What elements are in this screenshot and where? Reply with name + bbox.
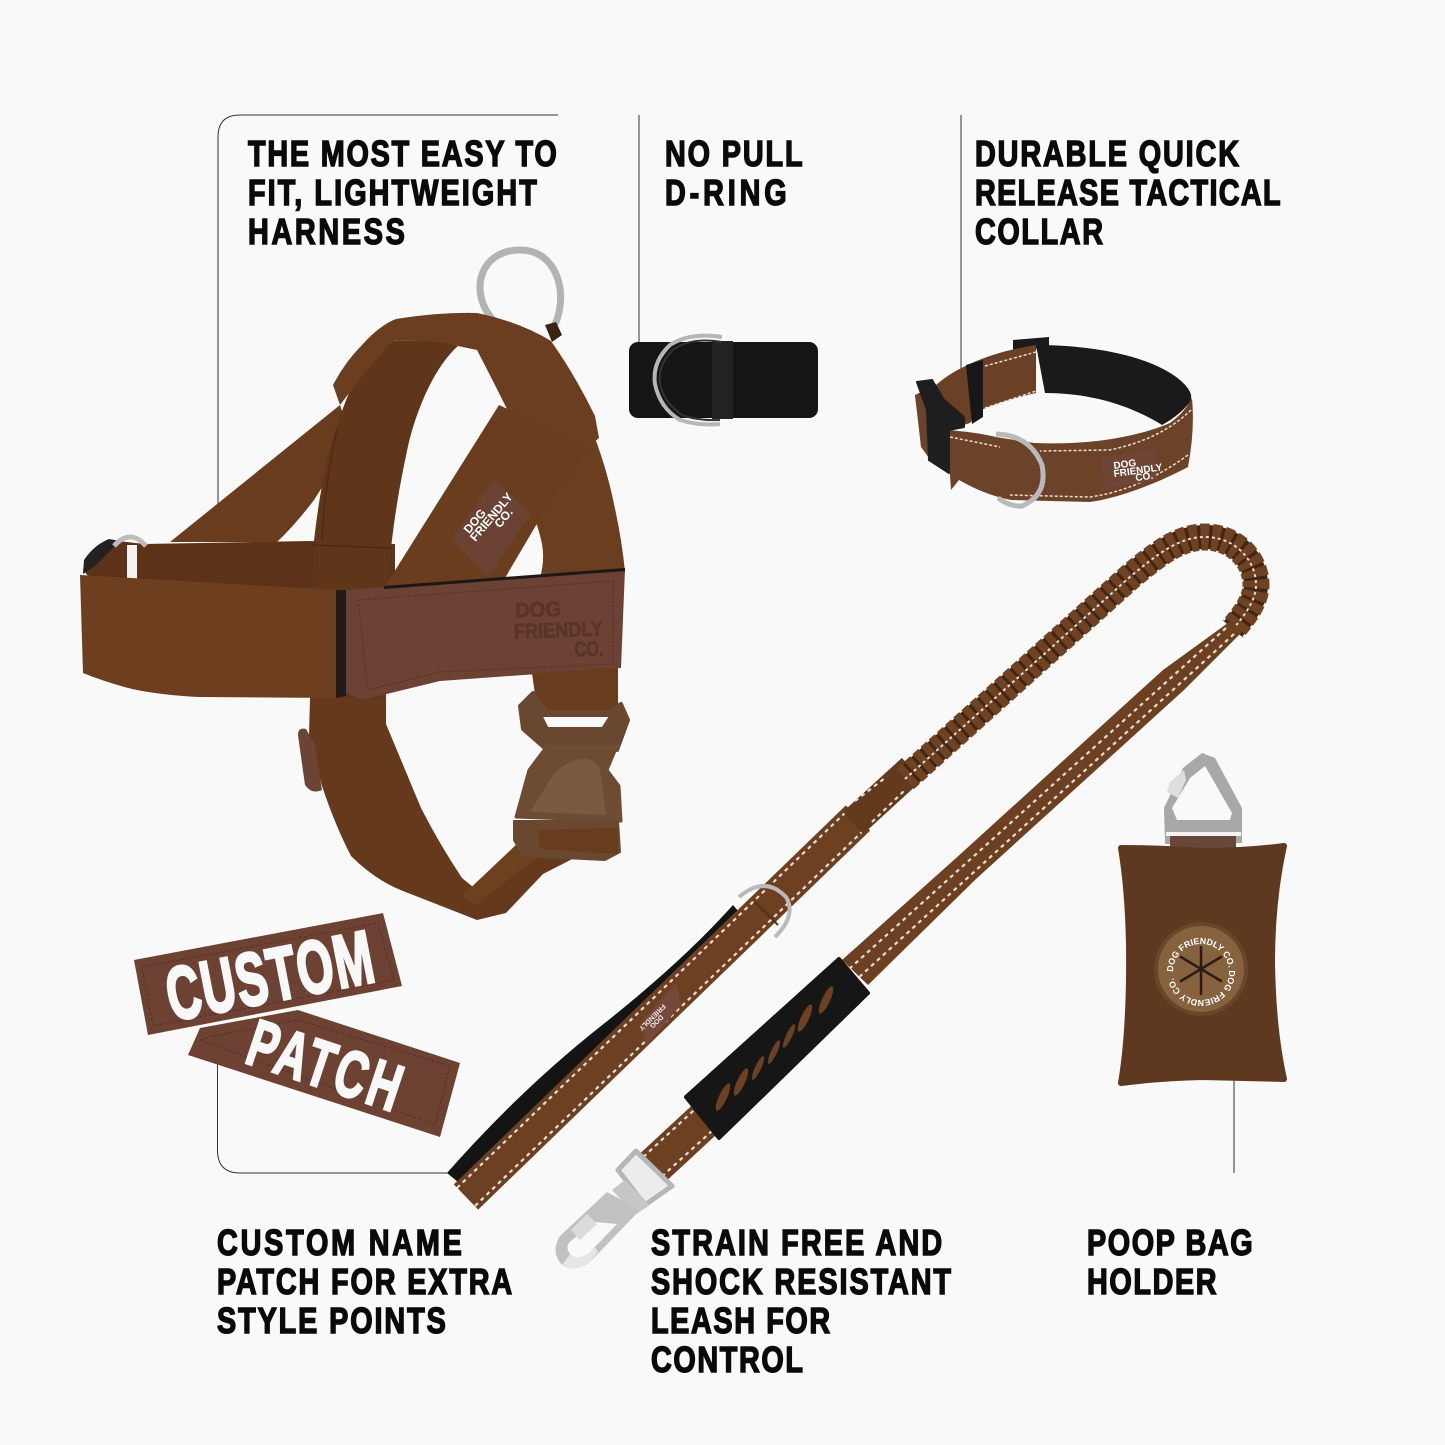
lower strap bbox=[648, 1110, 715, 1172]
diagonal label: FRIENDLY bbox=[467, 490, 516, 544]
caption: leash: LEASH FOR bbox=[651, 1300, 830, 1341]
heading: collar: RELEASE TACTICAL bbox=[975, 172, 1281, 213]
right side strap bbox=[532, 425, 625, 578]
patch: custom: CUSTOM bbox=[159, 916, 380, 1038]
belt bbox=[80, 575, 336, 698]
heading: collar bbox=[975, 133, 1281, 252]
patch: patch bbox=[188, 1010, 460, 1137]
return strap bbox=[842, 620, 1242, 985]
handle and middle strap bbox=[466, 818, 858, 1197]
quick release buckle bbox=[917, 380, 964, 473]
caption: leash: CONTROL bbox=[651, 1339, 803, 1380]
caption: poop bag holder bbox=[1087, 1222, 1253, 1302]
carabiner bbox=[1164, 753, 1242, 844]
caption: custom patch: PATCH FOR EXTRA bbox=[217, 1261, 512, 1302]
handle label bbox=[637, 983, 681, 1046]
poop bag holder bbox=[1118, 753, 1287, 1086]
rubber grip bbox=[686, 959, 868, 1138]
collar label: CO. bbox=[1135, 471, 1154, 484]
bungee section bbox=[905, 537, 1256, 779]
heading: d-ring: NO PULL bbox=[665, 133, 803, 174]
sleeve bbox=[853, 769, 912, 823]
heading: harness bbox=[248, 133, 557, 252]
collar label bbox=[1102, 448, 1164, 490]
diagonal label: DOG bbox=[461, 506, 489, 536]
band stitching bbox=[1040, 410, 1191, 451]
lining bbox=[408, 328, 480, 342]
pouch body bbox=[1121, 846, 1284, 1083]
front diagonal strap bbox=[384, 405, 590, 588]
diagonal label: CO. bbox=[491, 505, 516, 531]
caption: custom patch: STYLE POINTS bbox=[217, 1300, 446, 1341]
collar label: FRIENDLY bbox=[1113, 462, 1163, 480]
tri-glide slider bbox=[298, 729, 322, 792]
caption: custom patch bbox=[217, 1222, 512, 1341]
leather panel bbox=[346, 568, 625, 700]
velcro edge bbox=[336, 590, 346, 698]
heading: d-ring bbox=[665, 133, 803, 213]
caption: leash bbox=[651, 1222, 951, 1380]
upper band bbox=[915, 345, 1036, 440]
leather panel: CO. bbox=[574, 637, 604, 661]
handle label: FRIENDLY bbox=[637, 1002, 666, 1032]
harness bbox=[80, 250, 628, 920]
sliding ring bbox=[739, 886, 790, 937]
caption: leash: SHOCK RESISTANT bbox=[651, 1261, 951, 1302]
collar label: DOG bbox=[1113, 458, 1137, 472]
swivel snap hook bbox=[555, 1151, 672, 1268]
badge bbox=[1154, 922, 1248, 1016]
patch word: PATCH bbox=[239, 1005, 412, 1125]
front band bbox=[947, 398, 1193, 502]
black handle lining bbox=[447, 905, 750, 1200]
heading: harness: THE MOST EASY TO bbox=[248, 133, 557, 174]
caption: poop bag holder: POOP BAG bbox=[1087, 1222, 1253, 1263]
black keeper bbox=[966, 360, 983, 424]
caption: poop bag holder: HOLDER bbox=[1087, 1261, 1217, 1302]
neck loop bbox=[310, 340, 458, 700]
d-ring velcro patch bbox=[629, 336, 818, 424]
heading: harness: HARNESS bbox=[248, 211, 405, 252]
top keeper bbox=[1013, 337, 1049, 352]
leather panel: DOG bbox=[515, 598, 562, 623]
leash bbox=[447, 537, 1256, 1268]
top folded strap bbox=[333, 313, 599, 447]
buckle strap bbox=[532, 668, 618, 716]
collar bbox=[915, 337, 1193, 506]
collar inner lining bbox=[1036, 345, 1191, 425]
d-ring on harness bbox=[480, 250, 561, 330]
heading: d-ring: D-RING bbox=[665, 172, 787, 213]
diagonal back strap bbox=[170, 405, 352, 542]
leather panel: FRIENDLY bbox=[513, 618, 603, 644]
left band behind buckle bbox=[915, 395, 932, 462]
diagonal label bbox=[451, 480, 531, 577]
heading: collar: DURABLE QUICK bbox=[975, 133, 1239, 174]
collar d-ring bbox=[996, 434, 1043, 506]
plastic buckle bbox=[514, 693, 628, 860]
heading: collar: COLLAR bbox=[975, 211, 1103, 252]
custom name patches bbox=[134, 913, 460, 1137]
heading: harness: FIT, LIGHTWEIGHT bbox=[248, 172, 537, 213]
caption: leash: STRAIN FREE AND bbox=[651, 1222, 942, 1263]
badge: DOG FRIENDLY CO. DOG FRIENDLY CO. bbox=[1166, 938, 1236, 1006]
inner belt bbox=[83, 540, 395, 590]
caption: custom patch: CUSTOM NAME bbox=[217, 1222, 462, 1263]
lower strap bbox=[309, 698, 590, 920]
handle label: DOG bbox=[648, 1013, 664, 1030]
pouch strap bbox=[1170, 836, 1236, 850]
side loop bbox=[114, 537, 146, 589]
seams at slider bbox=[755, 902, 778, 925]
